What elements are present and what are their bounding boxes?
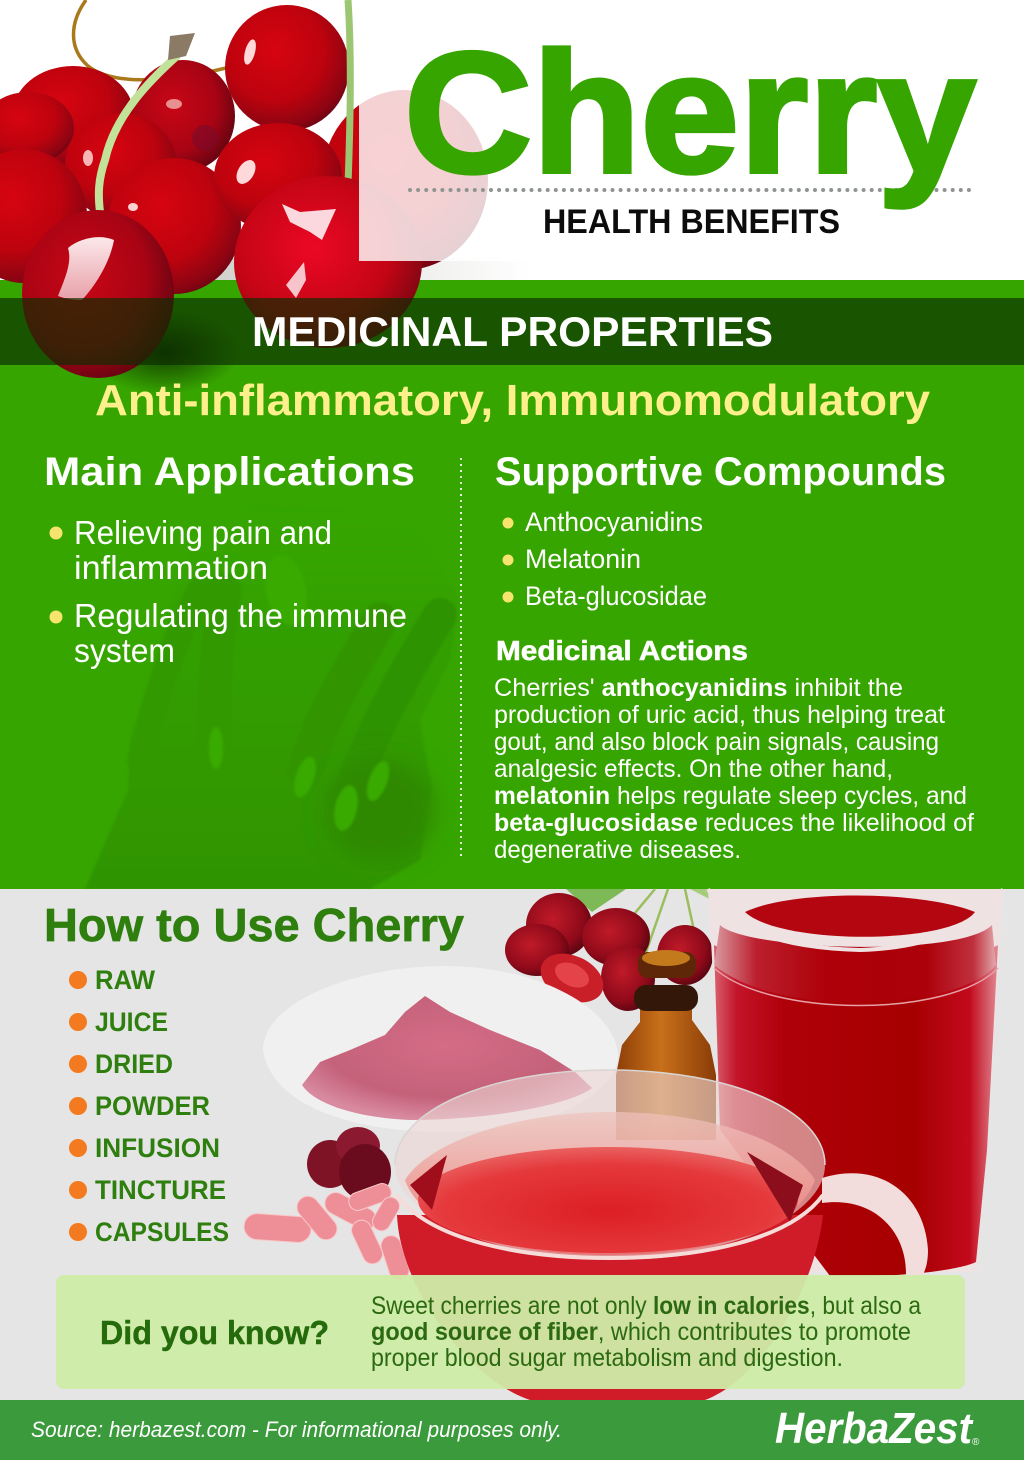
- application 2: Regulating the immune: [74, 597, 407, 634]
- how to use section background: [0, 889, 1024, 1400]
- compound list: Beta-glucosidae: [525, 581, 707, 611]
- icon: small cherries and leaves: [505, 889, 756, 1012]
- stems: [348, 0, 350, 185]
- medicinal actions paragraph: melatonin helps regulate sleep cycles, and: [494, 782, 967, 810]
- heading: medicinal properties: MEDICINAL PROPERTIES: [252, 308, 773, 355]
- application 1: [74, 514, 332, 586]
- icon: tea cup: [395, 1070, 928, 1400]
- bullet 2: [50, 610, 62, 624]
- callout heading: Did you know?: [100, 1314, 329, 1351]
- title: Cherry: Cherry: [404, 17, 976, 209]
- application 2: [74, 597, 407, 669]
- icon: dried cherries: [307, 1127, 391, 1200]
- application 2: system: [74, 632, 175, 669]
- footer: [0, 1400, 1024, 1460]
- title: [404, 17, 976, 241]
- icon: amber tincture bottle: [616, 950, 716, 1140]
- green medicinal section background: [0, 280, 1024, 889]
- medicinal actions paragraph: gout, and also block pain signals, causing: [494, 728, 939, 756]
- callout text: [371, 1292, 921, 1372]
- medicinal actions paragraph: beta-glucosidase reduces the likelihood of: [494, 809, 974, 837]
- heading: Supportive Compounds: [495, 450, 946, 494]
- icon: capsules: [243, 1181, 412, 1283]
- callout: did you know: [56, 1275, 965, 1389]
- dotted rule: [410, 188, 974, 192]
- medicinal actions paragraph: Cherries' anthocyanidins inhibit the: [494, 674, 903, 702]
- icon: glass of cherry juice: [708, 889, 1003, 1276]
- medicinal actions paragraph: degenerative diseases.: [494, 836, 741, 864]
- hand photo: [85, 505, 460, 889]
- list: forms of use: JUICE: [95, 1007, 168, 1037]
- list: forms of use: TINCTURE: [95, 1175, 226, 1205]
- cherry shadow on green: [90, 310, 240, 394]
- grey shadow below cherries: [200, 258, 530, 282]
- compound list: [502, 507, 707, 611]
- logo registered mark: ®: [972, 1437, 980, 1448]
- dark heading band: [0, 298, 1024, 365]
- property subtitle: Anti-inflammatory, Immunomodulatory: [95, 376, 931, 425]
- translucent title panel: [359, 0, 1024, 261]
- medicinal actions paragraph: production of uric acid, thus helping treat: [494, 701, 945, 729]
- compound list: Melatonin: [525, 544, 641, 574]
- callout text: Sweet cherries are not only low in calories, but also a: [371, 1292, 921, 1320]
- heading: Main Applications: [44, 450, 415, 494]
- subheading: medicinal actions: Medicinal Actions: [496, 635, 748, 666]
- callout text: proper blood sugar metabolism and digestion.: [371, 1344, 843, 1372]
- application 1: Relieving pain and: [74, 514, 332, 551]
- logo: HerbaZest: HerbaZest: [775, 1404, 974, 1453]
- cherry pile photo: [0, 0, 488, 378]
- subtitle: HEALTH BENEFITS: [543, 203, 840, 241]
- list: forms of use: CAPSULES: [95, 1217, 229, 1247]
- icon: bowl of cherry powder: [263, 966, 618, 1132]
- list: forms of use: INFUSION: [95, 1133, 220, 1163]
- heading: how to use cherry: How to Use Cherry: [44, 899, 464, 951]
- source note: Source: herbazest.com - For informational purposes only.: [31, 1417, 562, 1442]
- medicinal actions paragraph: analgesic effects. On the other hand,: [494, 755, 893, 783]
- list: forms of use: POWDER: [95, 1091, 210, 1121]
- panel: main applications: [44, 450, 415, 669]
- application 1: inflammation: [74, 549, 268, 586]
- list: forms of use: RAW: [95, 965, 155, 995]
- panel: supportive compounds: [494, 450, 974, 864]
- medicinal actions paragraph: [494, 674, 974, 864]
- bullet 1: [50, 526, 62, 540]
- list: forms of use: DRIED: [95, 1049, 173, 1079]
- compound list: Anthocyanidins: [525, 507, 703, 537]
- list: forms of use: [69, 965, 229, 1247]
- callout text: good source of fiber, which contributes to promote: [371, 1318, 911, 1346]
